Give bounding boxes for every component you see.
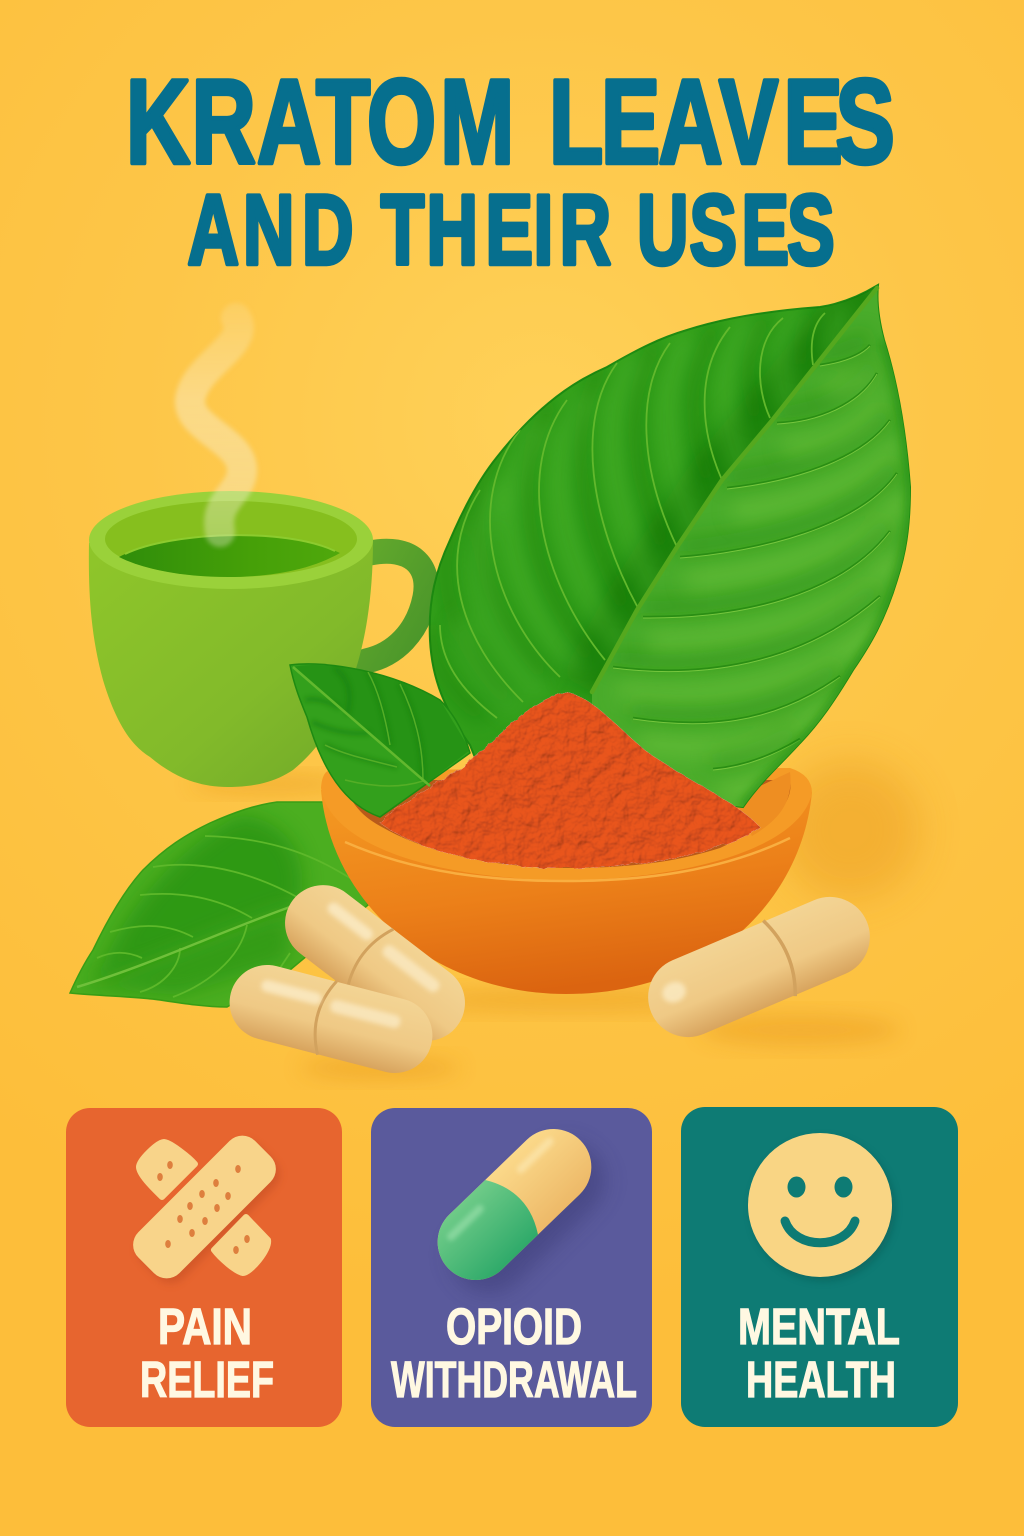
label: mental health: MENTAL: [738, 1298, 900, 1355]
cup rim: [89, 491, 373, 589]
illustration: tea, leaves, powder and capsules: [70, 270, 960, 1082]
cup interior: [105, 501, 357, 577]
icon: capsule pill: [422, 1113, 621, 1309]
lower left leaf: [70, 802, 368, 1007]
title word: LEAVES: LEAVES: [549, 55, 895, 189]
title word: KRATOM: KRATOM: [126, 55, 514, 189]
label: pain relief: RELIEF: [140, 1351, 274, 1408]
tea cup: [89, 491, 426, 787]
cup body: [89, 540, 373, 787]
label: pain relief: [140, 1298, 274, 1408]
title: [126, 55, 895, 286]
label: pain relief: PAIN: [158, 1298, 252, 1355]
label: mental health: HEALTH: [746, 1351, 896, 1408]
panel: mental health: [681, 1107, 958, 1427]
title word: USES: USES: [637, 176, 835, 286]
big kratom leaf: [428, 270, 960, 820]
label: opioid withdrawal: WITHDRAWAL: [391, 1351, 637, 1408]
lower leaf midrib: [77, 907, 290, 987]
label: mental health: [738, 1298, 900, 1408]
label: opioid withdrawal: [391, 1298, 637, 1408]
small leaf midrib: [293, 667, 430, 786]
capsule lower left: [221, 956, 441, 1082]
tea liquid: [119, 536, 340, 577]
small kratom leaf: [290, 664, 470, 817]
ground shadows: [190, 760, 920, 1080]
label: opioid withdrawal: OPIOID: [446, 1298, 582, 1355]
panel: pain relief: [66, 1108, 342, 1427]
title word: AND: AND: [188, 176, 353, 286]
right half shading: [592, 285, 910, 807]
cup handle: [366, 551, 426, 661]
bowl interior: [345, 780, 790, 868]
icon: steam: [190, 318, 242, 532]
leaf midrib: [592, 288, 877, 692]
bowl body: [321, 790, 812, 994]
title word: THEIR: THEIR: [381, 176, 611, 286]
bowl: [321, 768, 812, 994]
icon: smiley face: [748, 1133, 895, 1281]
icon: crossed bandages: [126, 1128, 287, 1291]
leaf edge shading: [743, 340, 910, 807]
panel: opioid withdrawal: [371, 1108, 652, 1427]
left half shading: [428, 290, 878, 718]
capsule right: [635, 884, 883, 1050]
bowl rim: [321, 768, 812, 880]
powder pile: [380, 692, 760, 868]
capsule upper left: [270, 870, 480, 1056]
